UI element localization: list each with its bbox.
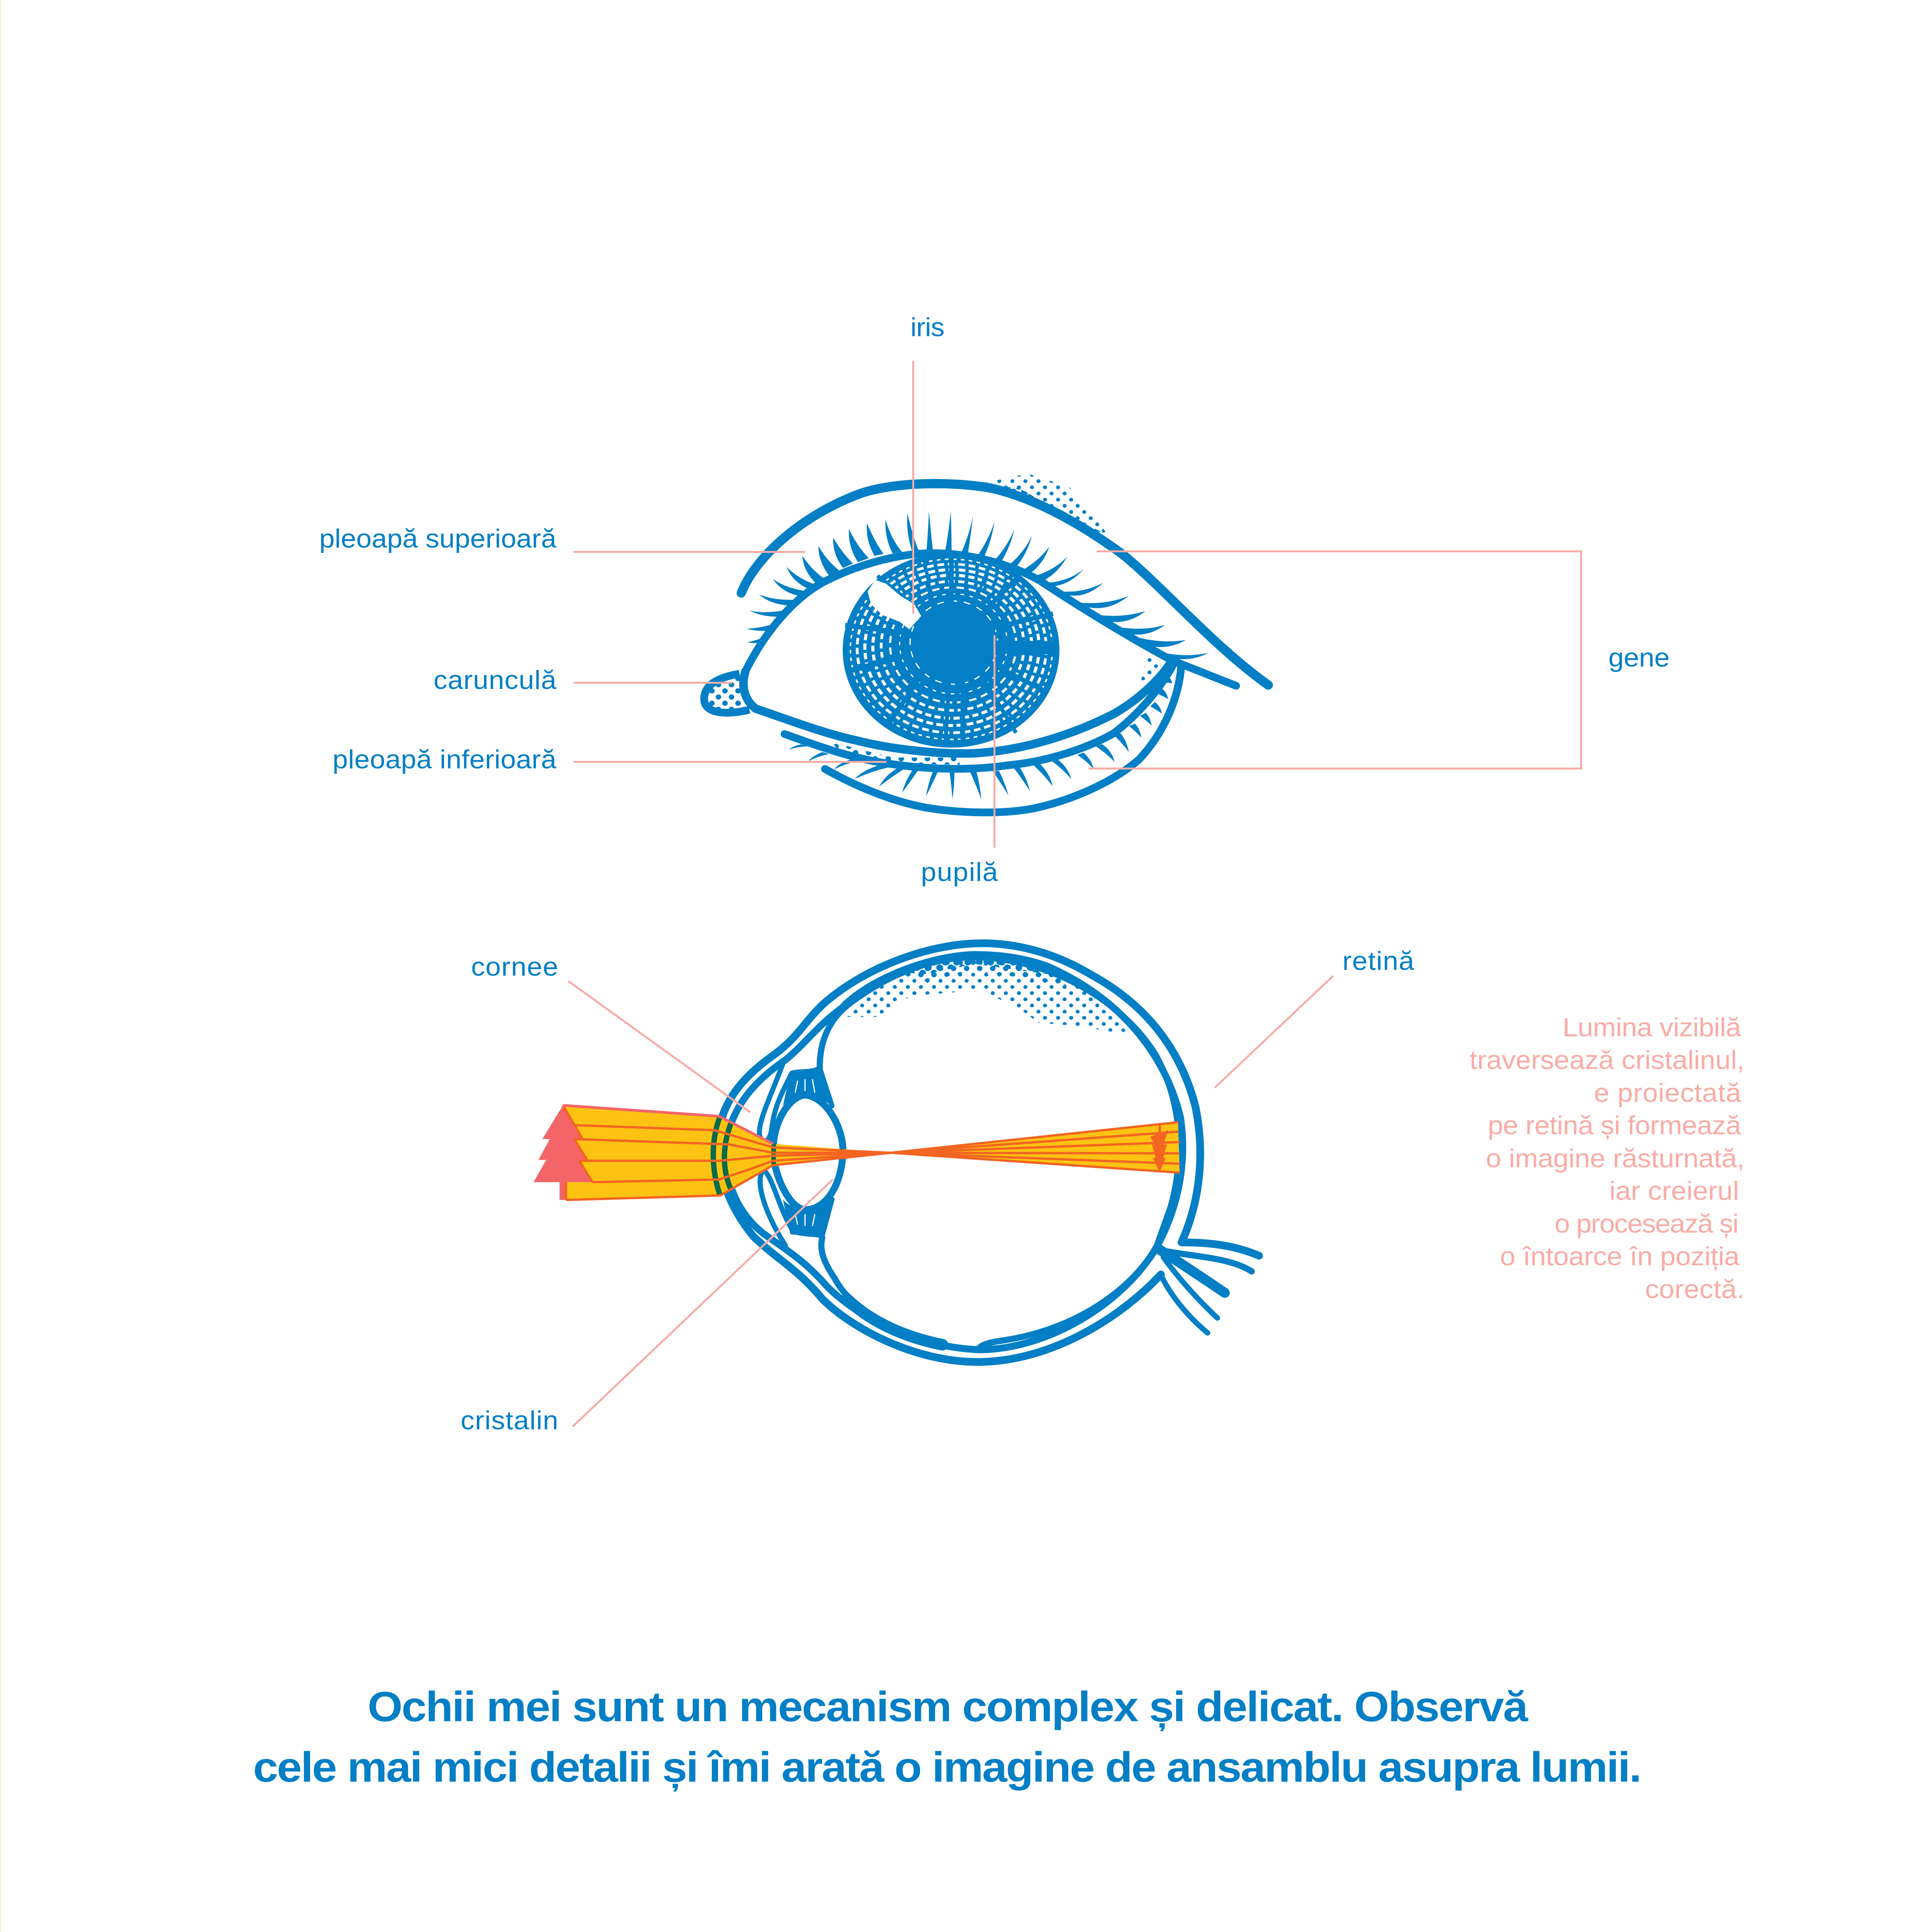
lower eyelashes bbox=[789, 675, 1172, 799]
iris highlight bbox=[867, 580, 921, 629]
light beam bbox=[563, 1105, 1180, 1200]
eye outlines bbox=[741, 484, 1268, 813]
halftone: eye corner bbox=[1139, 651, 1161, 689]
text block: explanation: e proiectată bbox=[1594, 1078, 1741, 1107]
text block: explanation: iar creierul bbox=[1609, 1176, 1739, 1206]
beam: incoming bbox=[563, 1105, 891, 1200]
iris rings bbox=[850, 559, 1053, 740]
halftone: brow shadow bbox=[983, 474, 1109, 535]
text block: explanation: traversează cristalinul, bbox=[1469, 1045, 1745, 1075]
eyeball outlines bbox=[718, 943, 1259, 1362]
icon: inverted tree on retina bbox=[1150, 1124, 1168, 1173]
halftone: lower lid band bbox=[831, 742, 960, 765]
heading: conclusion: Ochii mei sunt un mecanism complex și delicat. Observă bbox=[367, 1683, 1529, 1731]
text block: explanation: pe retină și formează bbox=[1488, 1111, 1741, 1140]
beam: focused on retina bbox=[891, 1122, 1180, 1173]
caruncle bbox=[704, 674, 749, 713]
label: cornee: cornee bbox=[471, 952, 558, 981]
text block: explanation: Lumina vizibilă bbox=[1563, 1013, 1741, 1042]
label: pleoapă superioară: pleoapă superioară bbox=[319, 524, 556, 553]
text block: explanation bbox=[1469, 1013, 1745, 1304]
illustration: external eye bbox=[704, 474, 1268, 813]
iris loops and lens bbox=[759, 1061, 843, 1245]
heading: conclusion: cele mai mici detalii și îmi arată o imagine de ansamblu asupra lumii. bbox=[253, 1743, 1642, 1792]
label: carunculă: carunculă bbox=[434, 665, 556, 694]
label: gene: gene bbox=[1609, 643, 1670, 672]
text block: explanation: corectă. bbox=[1645, 1274, 1745, 1304]
text block: explanation: o imagine răsturnată, bbox=[1486, 1144, 1745, 1173]
label: pupilă: pupilă bbox=[921, 857, 998, 887]
text block: explanation: o întoarce în poziția bbox=[1500, 1242, 1740, 1271]
label: iris: iris bbox=[910, 313, 945, 342]
icon: tree bbox=[534, 1105, 592, 1200]
green cornea and lens arcs bbox=[713, 1116, 842, 1196]
ciliary body bbox=[783, 1069, 832, 1236]
iris bbox=[843, 553, 1060, 748]
light rays bbox=[563, 1105, 1180, 1200]
leader lines bbox=[568, 361, 1581, 1427]
upper eyelashes bbox=[747, 511, 1209, 659]
heading: conclusion bbox=[253, 1683, 1642, 1792]
label: cristalin: cristalin bbox=[461, 1406, 558, 1435]
label: pleoapă inferioară: pleoapă inferioară bbox=[333, 745, 556, 774]
optic nerve bbox=[1158, 1250, 1252, 1333]
illustration: eye cross-section bbox=[534, 943, 1259, 1362]
halftone: retina shading bbox=[847, 956, 1129, 1035]
iris spokes bbox=[845, 555, 1058, 746]
pupil bbox=[915, 604, 994, 680]
label: retină: retină bbox=[1342, 946, 1414, 975]
text block: explanation: o procesează și bbox=[1554, 1209, 1739, 1238]
